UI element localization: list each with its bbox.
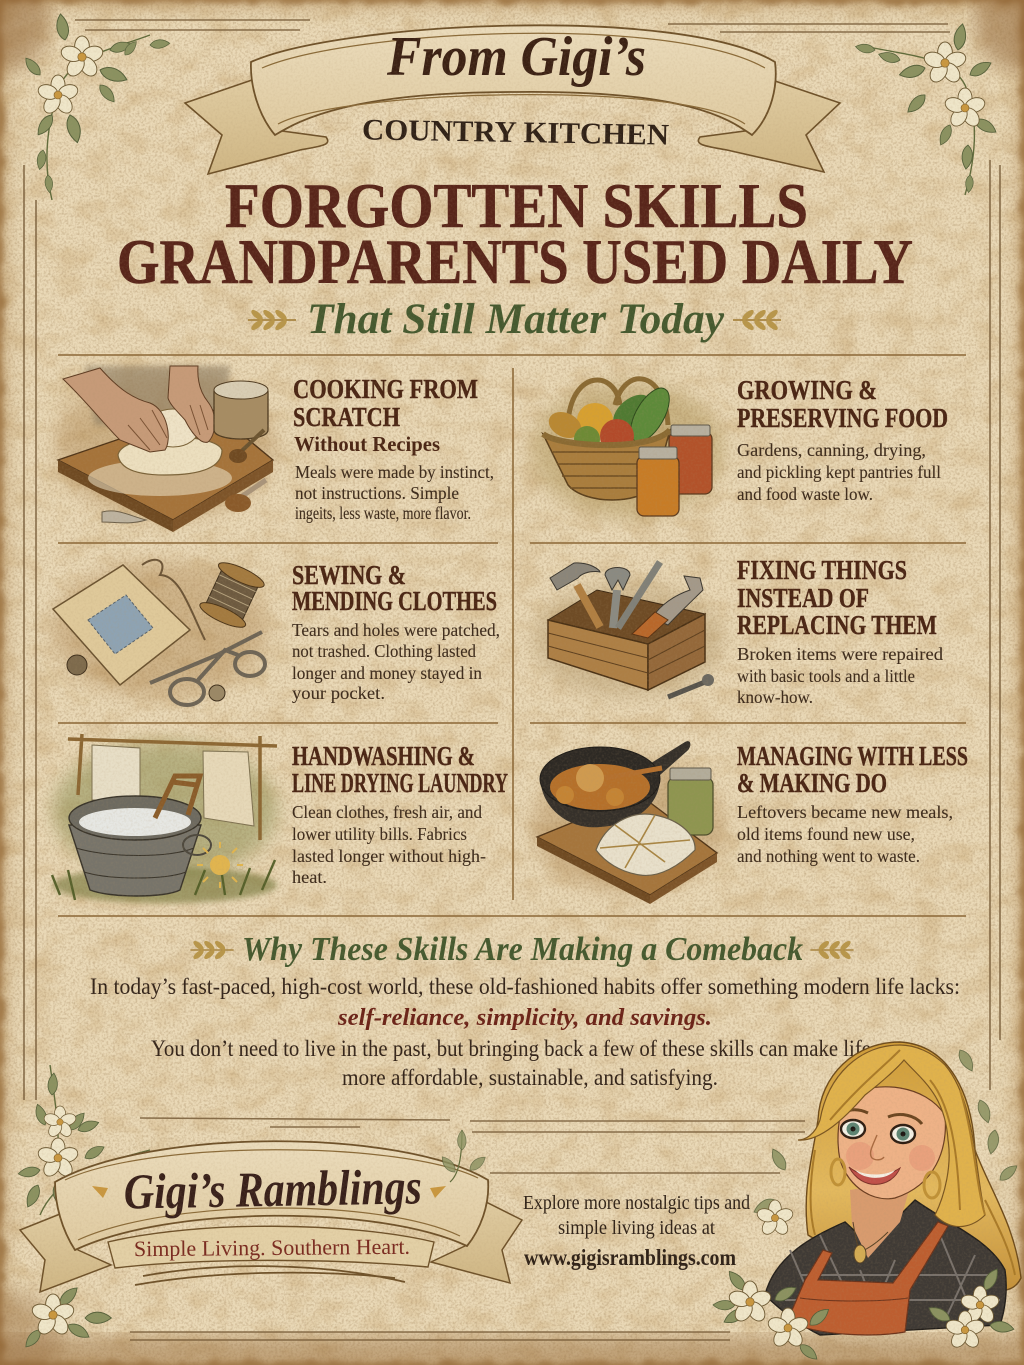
tagline: Simple Living. Southern Heart. <box>134 1234 410 1261</box>
earrings <box>831 1159 940 1198</box>
panel: cooking from scratch: SCRATCH <box>293 402 400 432</box>
panel: managing with less <box>532 741 968 904</box>
heading: COOKING FROM <box>293 374 478 404</box>
body text: not trashed. Clothing lasted <box>292 641 476 661</box>
illustration: basket and jars <box>532 379 724 518</box>
section: why these skills <box>90 931 960 1090</box>
illustration: washtub and clothesline <box>52 734 277 903</box>
body text: heat. <box>292 867 327 887</box>
panel: fixing things: REPLACING THEM <box>737 610 937 640</box>
main title: FORGOTTEN SKILLS <box>225 171 808 241</box>
website call to action <box>523 1192 750 1270</box>
sprig above ribbon <box>439 1130 488 1182</box>
body text: ingeits, less waste, more flavor. <box>295 503 471 523</box>
body text <box>292 802 486 887</box>
closing sentence: You don’t need to live in the past, but bringing back a few of these skills can make life <box>151 1036 871 1061</box>
body text <box>737 802 953 866</box>
body text <box>292 620 500 703</box>
panel: cooking from scratch <box>55 366 494 532</box>
apron <box>787 1222 948 1335</box>
body text: know-how. <box>737 687 813 707</box>
ribbon tails <box>185 80 840 174</box>
body text <box>737 644 943 707</box>
panel: growing and preserving: PRESERVING FOOD <box>737 403 948 433</box>
main band <box>55 1141 488 1250</box>
lower tagline band <box>108 1226 434 1268</box>
body text: lower utility bills. Fabrics <box>292 824 467 844</box>
illustration: toolbox <box>532 562 724 698</box>
body text: not instructions. Simple <box>295 483 459 503</box>
heading: SEWING & <box>292 560 406 590</box>
face <box>838 1087 945 1199</box>
floral: bottom left <box>22 1284 111 1350</box>
heading ornament left <box>190 939 234 961</box>
body text: Leftovers became new meals, <box>737 802 953 822</box>
illustration: patch, spool and scissors <box>52 558 268 705</box>
website url: www.gigisramblings.com <box>524 1245 736 1270</box>
subtitle with wheat ornaments: That Still Matter Today <box>307 296 725 343</box>
nose and smile <box>849 1135 900 1184</box>
closing sentence: more affordable, sustainable, and satisfying. <box>342 1065 718 1090</box>
website call to action: simple living ideas at <box>558 1217 715 1239</box>
body text: with basic tools and a little <box>737 666 915 686</box>
portrait: Gigi <box>713 1042 1021 1363</box>
emphasis line: self-reliance, simplicity, and savings. <box>337 1005 712 1031</box>
hair front <box>798 1045 985 1227</box>
closing sentence <box>151 1036 871 1090</box>
body text: Clean clothes, fresh air, and <box>292 802 482 822</box>
body text: old items found new use, <box>737 824 915 844</box>
panel: fixing things: INSTEAD OF <box>737 583 869 613</box>
section heading: Why These Skills Are Making a Comeback <box>242 931 803 968</box>
heading ornament right <box>810 939 854 961</box>
subheading: Without Recipes <box>294 432 440 456</box>
main title <box>117 171 913 297</box>
body text: and pickling kept pantries full <box>737 462 941 482</box>
body text: Broken items were repaired <box>737 644 943 664</box>
shirt <box>765 1200 1006 1335</box>
body text: your pocket. <box>292 683 385 703</box>
body text: Meals were made by instinct, <box>295 462 494 482</box>
grid dividers <box>58 355 966 916</box>
background foliage <box>752 1047 1020 1217</box>
main title: GRANDPARENTS USED DAILY <box>117 227 913 297</box>
subtitle: Country Kitchen: COUNTRY KITCHEN <box>362 113 670 152</box>
panel: managing with less: & MAKING DO <box>737 768 887 798</box>
ornaments <box>92 1186 446 1198</box>
body text: and food waste low. <box>737 484 873 504</box>
footer ribbon: Gigi's Ramblings <box>20 1141 522 1292</box>
hair back <box>806 1042 1021 1290</box>
brand script: From Gigi's: From Gigi’s <box>386 26 646 88</box>
body text: longer and money stayed in <box>292 663 482 683</box>
panel: handwashing and line drying <box>52 734 508 903</box>
body text <box>295 462 494 523</box>
flowers at bottom <box>713 1266 1015 1363</box>
body text: and nothing went to waste. <box>737 846 920 866</box>
intro sentence: In today’s fast-paced, high-cost world, these old-fashioned habits offer something modern life lacks: <box>90 974 960 999</box>
necklace <box>853 1222 888 1263</box>
footer rule lines <box>140 1118 805 1173</box>
neck <box>850 1180 912 1258</box>
heading: FIXING THINGS <box>737 555 907 585</box>
floral: lower left <box>18 1065 150 1215</box>
ribbon tails <box>20 1198 522 1292</box>
brand name: Gigi’s Ramblings <box>123 1158 422 1220</box>
illustration: skillet, jar and bundle <box>532 741 724 904</box>
body text: Tears and holes were patched, <box>292 620 500 640</box>
ribbon main band <box>251 25 776 135</box>
panel: handwashing and line drying: LINE DRYING LAUNDRY <box>292 768 508 798</box>
corner floral: top right <box>855 23 999 195</box>
heading: HANDWASHING & <box>292 741 475 771</box>
panel: growing and preserving <box>532 375 948 518</box>
top ribbon banner <box>185 25 840 174</box>
panel: sewing and mending <box>52 558 500 705</box>
illustration: kneading dough <box>55 366 275 532</box>
body text: lasted longer without high- <box>292 846 486 866</box>
body text: Gardens, canning, drying, <box>737 440 926 460</box>
website call to action: Explore more nostalgic tips and <box>523 1192 750 1214</box>
heading: GROWING & <box>737 375 877 405</box>
corner floral: top left <box>22 13 170 200</box>
panel: fixing things <box>532 555 943 707</box>
eyes <box>838 1110 922 1143</box>
body text <box>737 440 941 504</box>
panel: sewing and mending: MENDING CLOTHES <box>292 586 497 616</box>
